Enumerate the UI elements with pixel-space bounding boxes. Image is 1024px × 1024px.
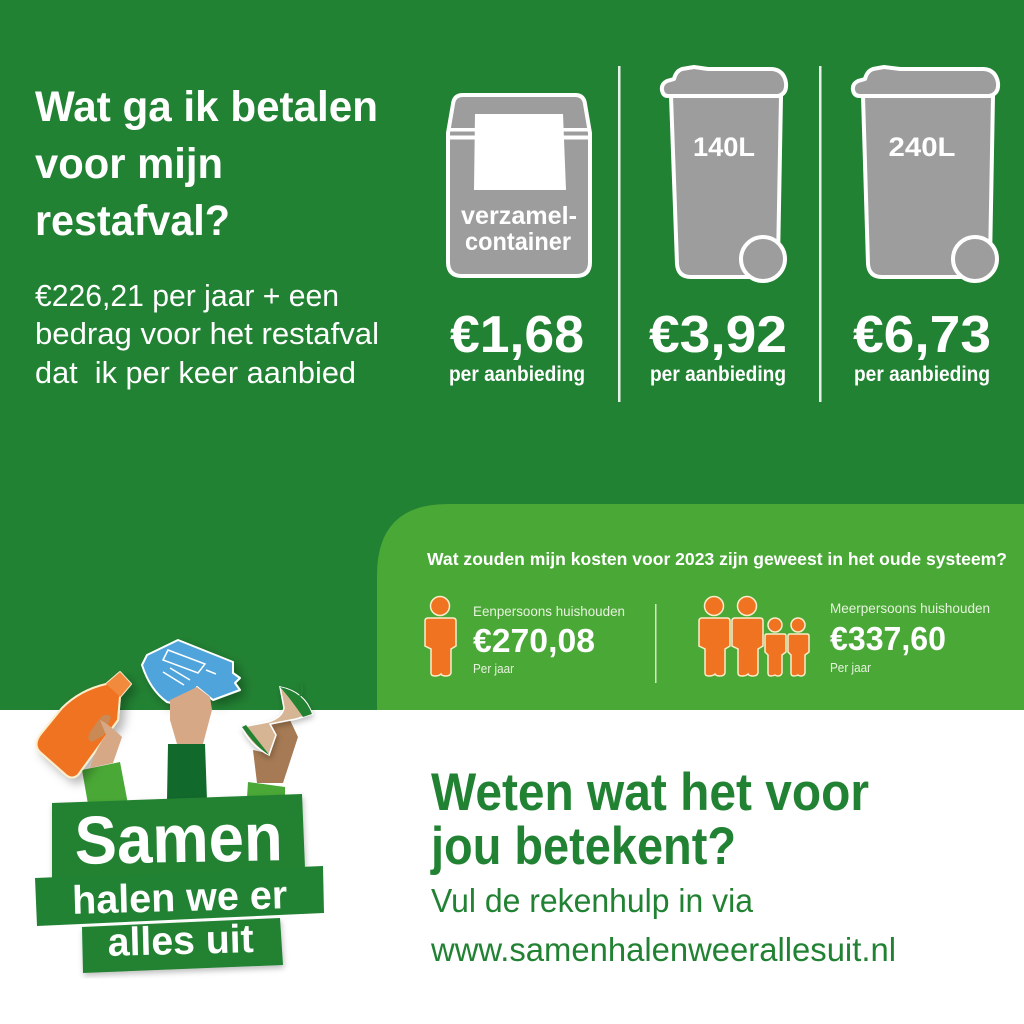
- logo text: halen we er: halen we er: [72, 873, 288, 923]
- divider: [819, 66, 822, 402]
- price: container: €1,68: [450, 306, 584, 364]
- sleeve: centre: [167, 744, 207, 800]
- price: 240L: [853, 306, 991, 386]
- website url: www.samenhalenweerallesuit.nl: [430, 931, 896, 968]
- price: container: per aanbieding: [449, 363, 585, 386]
- hand: centre: [170, 687, 212, 744]
- text: multi-person household: [830, 600, 990, 675]
- icon: 240L bin: 240L: [888, 132, 956, 162]
- panel heading: Wat zouden mijn kosten voor 2023 zijn geweest in het oude systeem?: [427, 549, 1007, 569]
- price: 240L: €6,73: [853, 306, 991, 364]
- heading: main question: voor mijn: [35, 140, 223, 188]
- call to action heading: jou betekent?: [430, 817, 736, 876]
- text block: yearly price: [35, 278, 379, 390]
- price: 240L: per aanbieding: [854, 363, 990, 386]
- text: multi-person household: €337,60: [830, 620, 946, 657]
- icon: 240L bin: [853, 67, 998, 281]
- call to action heading: [430, 763, 869, 876]
- price: container: [449, 306, 585, 386]
- heading: main question: [35, 83, 378, 245]
- text: multi-person household: Meerpersoons huishouden: [830, 600, 990, 616]
- icon: 140L bin: 140L: [693, 132, 755, 162]
- icon: family: [699, 596, 809, 676]
- icon: newspaper: [142, 640, 240, 707]
- banner: top: [52, 794, 305, 880]
- icon: collection container: [448, 95, 590, 276]
- heading: main question: restafval?: [35, 197, 230, 245]
- call to action heading: Weten wat het voor: [431, 763, 869, 822]
- text block: yearly price: dat ik per keer aanbied: [35, 355, 356, 390]
- logo: Samen halen we er alles uit: [35, 794, 324, 973]
- price: 140L: €3,92: [649, 306, 787, 364]
- icon: one person: [425, 596, 456, 676]
- background: white bottom section: [0, 710, 1024, 1024]
- divider: [618, 66, 620, 402]
- text block: yearly price: bedrag voor het restafval: [35, 316, 379, 351]
- call to action text: Vul de rekenhulp in via: [431, 882, 754, 919]
- logo text: Samen: Samen: [74, 799, 283, 879]
- banner: middle: [35, 866, 324, 926]
- text: single-person household: €270,08: [473, 622, 595, 659]
- icon: detergent bottle: [36, 672, 131, 778]
- sleeve: left: [82, 762, 128, 804]
- icon: collection container: container: [465, 228, 571, 256]
- panel: old system costs: [377, 504, 1024, 710]
- banner: bottom: [82, 918, 283, 973]
- text: single-person household: Per jaar: [473, 662, 514, 676]
- text: single-person household: Eenpersoons huishouden: [473, 603, 625, 619]
- illustration: hands holding waste: [36, 640, 312, 804]
- icon: collection container: verzamel-: [461, 202, 577, 230]
- heading: main question: Wat ga ik betalen: [35, 83, 378, 131]
- background: dark green top section: [0, 0, 1024, 710]
- price: 140L: per aanbieding: [650, 363, 786, 386]
- price: 140L: [649, 306, 787, 386]
- text: multi-person household: Per jaar: [830, 661, 871, 675]
- icon: 140L bin: [662, 67, 786, 281]
- text block: yearly price: €226,21 per jaar + een: [35, 278, 339, 313]
- text: single-person household: [473, 603, 625, 676]
- logo text: alles uit: alles uit: [107, 917, 254, 965]
- hand: right: [253, 720, 298, 783]
- divider: [655, 604, 656, 683]
- sleeve: right: [247, 782, 285, 798]
- icon: banana peel: [242, 680, 312, 755]
- hand: left: [90, 720, 122, 768]
